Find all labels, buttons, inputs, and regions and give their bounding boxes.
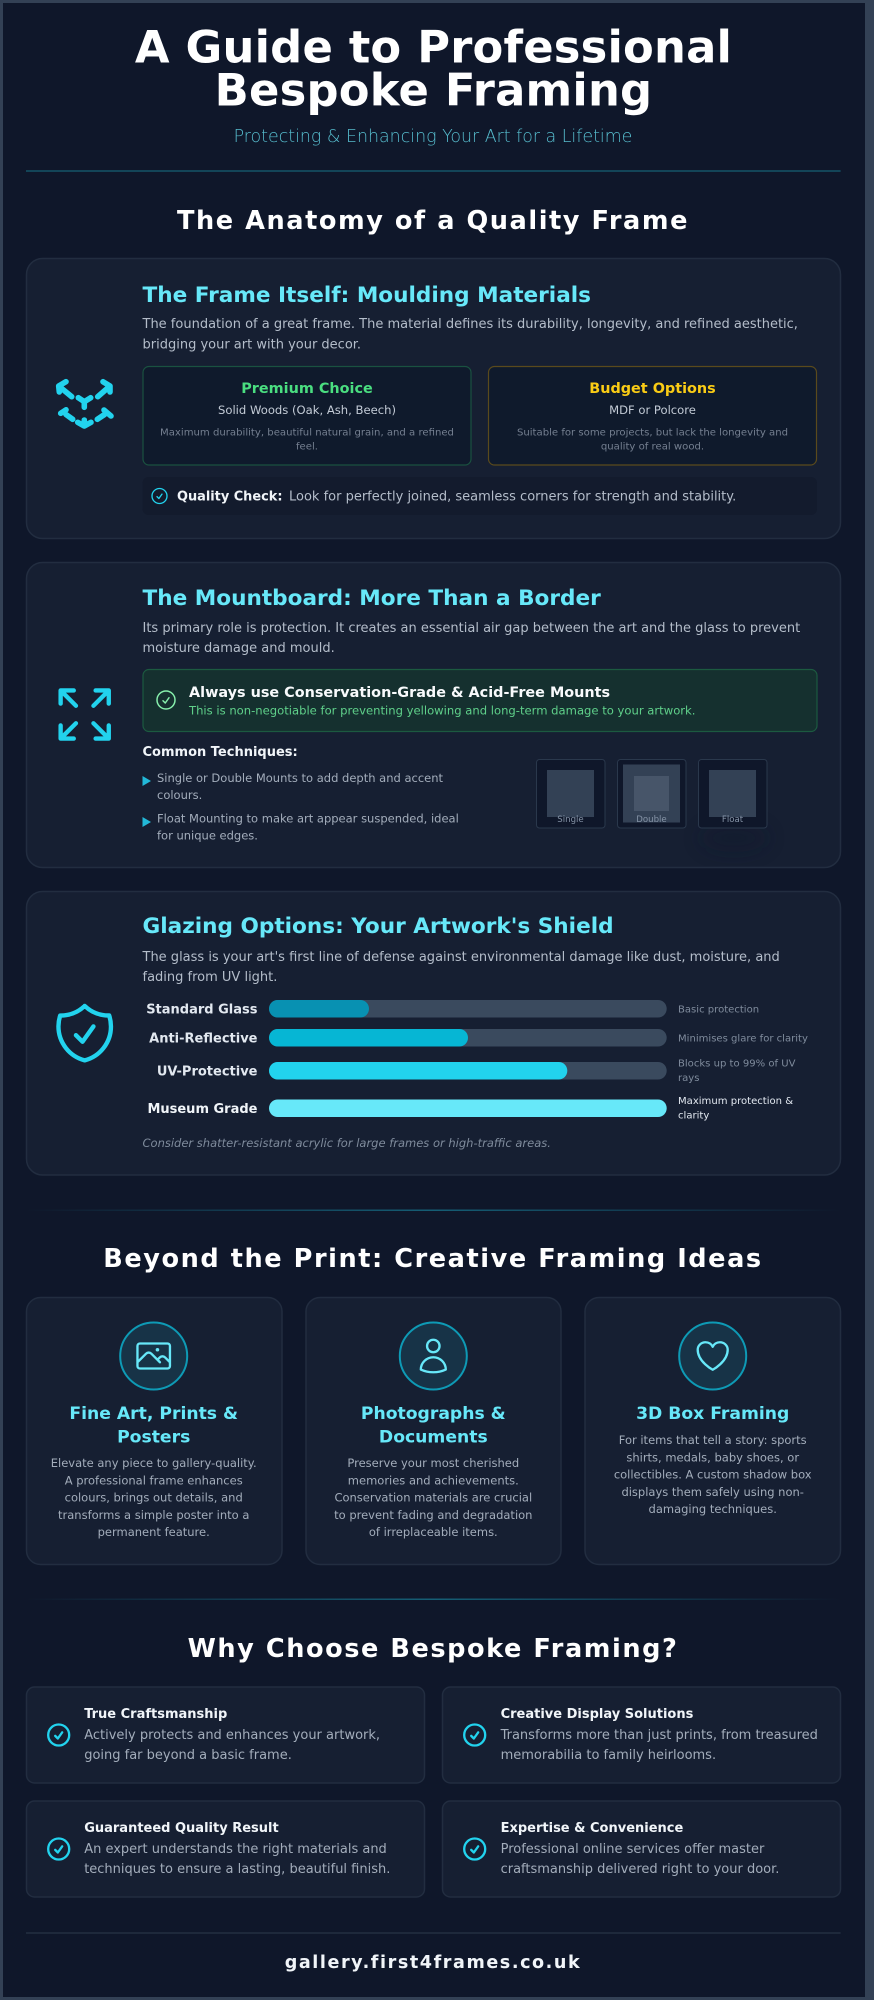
panel: display solutions: [442, 1687, 840, 1783]
heading: photographs: [361, 1404, 506, 1448]
heading: fine art: Posters: [117, 1428, 190, 1448]
heading: photographs: Photographs &: [361, 1404, 506, 1424]
heading: 3D box: 3D Box Framing: [636, 1404, 789, 1424]
list: common techniques: Single or Double Mounts to add depth and accent: [157, 771, 444, 785]
heading: glazing: Glazing Options: Your Artwork's Shield: [142, 914, 614, 939]
panel: craftsmanship: True Craftsmanship: [84, 1707, 227, 1722]
box: budget options: MDF or Polcore: [609, 403, 696, 417]
text: moulding intro: [142, 317, 798, 352]
heading: fine art: Fine Art, Prints &: [69, 1404, 238, 1424]
title: Bespoke Framing: [215, 64, 652, 116]
bar chart: glazing protection: Museum Grade: [147, 1102, 258, 1117]
panel: expertise: [442, 1801, 840, 1897]
icon: person: [400, 1322, 467, 1390]
text: 3D box: damaging techniques.: [649, 1502, 777, 1516]
list: common techniques: colours.: [157, 788, 202, 802]
list: common techniques: [142, 745, 459, 842]
text: 3D box: [614, 1433, 812, 1516]
text: glazing intro: [142, 950, 780, 985]
panel: craftsmanship: [26, 1687, 424, 1783]
text: moulding intro: The foundation of a great frame. The material defines its durability, longevity, and refined aesthetic,: [142, 317, 798, 332]
panel: quality result: An expert understands the right materials and: [84, 1842, 387, 1857]
text: fine art: A professional frame enhances: [65, 1473, 243, 1487]
panel: photographs: [306, 1298, 561, 1564]
text: fine art: Elevate any piece to gallery-quality.: [51, 1456, 257, 1470]
panel: quality result: techniques to ensure a lasting, beautiful finish.: [84, 1862, 390, 1877]
diagram: single mount: Single: [557, 815, 584, 825]
callout: quality check: [142, 477, 817, 515]
callout: quality check: Quality Check:: [177, 490, 282, 504]
text: 3D box: collectibles. A custom shadow box: [614, 1468, 812, 1482]
text: fine art: transforms a simple poster into a: [58, 1508, 249, 1522]
diagram: double mount: Double: [636, 815, 667, 825]
text: photographs: memories and achievements.: [348, 1473, 519, 1487]
box: budget options: Budget Options: [589, 381, 716, 397]
icon: arrows pointing out: [61, 690, 109, 739]
panel: expertise: Expertise & Convenience: [501, 1821, 684, 1836]
panel: glazing: [26, 892, 840, 1175]
panel: quality result: Guaranteed Quality Result: [84, 1821, 279, 1836]
text: 3D box: For items that tell a story: sports: [619, 1433, 807, 1447]
text: 3D box: displays them safely using non-: [621, 1485, 804, 1499]
text: moulding intro: bridging your art with your decor.: [142, 338, 361, 352]
diagram: float mount: Float: [722, 815, 744, 825]
text: photographs: Preserve your most cherished: [347, 1456, 519, 1470]
bar chart: glazing protection: Blocks up to 99% of UV: [678, 1058, 796, 1070]
text: photographs: [334, 1456, 532, 1539]
bar chart: glazing protection: [146, 1000, 808, 1122]
text: photographs: to prevent fading and degradation: [334, 1508, 532, 1522]
icon: cube frame: [59, 382, 111, 426]
text: photographs: of irreplaceable items.: [369, 1525, 498, 1539]
bar chart: glazing protection: Maximum protection &: [678, 1096, 793, 1107]
icon: shield check: [58, 1006, 111, 1060]
heading: fine art: [69, 1404, 238, 1448]
list: common techniques: Common Techniques:: [142, 745, 298, 760]
subtitle: Protecting & Enhancing Your Art for a Lifetime: [234, 127, 632, 147]
text: photographs: Conservation materials are crucial: [334, 1491, 532, 1505]
title: A Guide to Professional: [135, 20, 732, 74]
heading: why choose: Why Choose Bespoke Framing?: [188, 1634, 678, 1664]
text: fine art: [51, 1456, 257, 1539]
diagram: float mount: [698, 760, 768, 852]
box: premium choice: Solid Woods (Oak, Ash, Beech): [218, 403, 396, 417]
panel: craftsmanship: going far beyond a basic frame.: [84, 1748, 292, 1763]
bar chart: glazing protection: Basic protection: [678, 1004, 759, 1016]
list: common techniques: for unique edges.: [157, 828, 258, 842]
text: mountboard intro: Its primary role is protection. It creates an essential air gap between the art and the glass to prevent: [142, 621, 800, 636]
panel: expertise: Professional online services offer master: [501, 1842, 765, 1857]
box: premium choice: Premium Choice: [241, 381, 373, 397]
panel: quality result: [26, 1801, 424, 1897]
panel: craftsmanship: Actively protects and enhances your artwork,: [84, 1728, 380, 1743]
callout: quality check: Look for perfectly joined, seamless corners for strength and stability.: [289, 490, 736, 504]
bar chart: glazing protection: Minimises glare for clarity: [678, 1034, 808, 1044]
bar chart: glazing protection: clarity: [678, 1110, 709, 1122]
note: acrylic: Consider shatter-resistant acrylic for large frames or high-traffic areas.: [142, 1136, 551, 1150]
bar chart: glazing protection: rays: [678, 1073, 699, 1084]
text: fine art: colours, brings out details, and: [65, 1491, 243, 1505]
box: premium choice: feel.: [296, 442, 318, 452]
panel: expertise: craftsmanship delivered right to your door.: [501, 1862, 779, 1877]
panel: display solutions: memorabilia to family heirlooms.: [501, 1748, 716, 1763]
panel: display solutions: Transforms more than just prints, from treasured: [500, 1728, 818, 1743]
footer url: gallery.first4frames.co.uk: [285, 1953, 581, 1973]
text: mountboard intro: moisture damage and mould.: [142, 641, 335, 656]
heading: photographs: Documents: [379, 1428, 488, 1448]
panel: moulding materials: [26, 258, 840, 538]
diagram: single mount: [536, 760, 605, 828]
box: budget options: Suitable for some projects, but lack the longevity and: [517, 428, 788, 438]
text: fine art: permanent feature.: [98, 1525, 210, 1539]
box: budget options: quality of real wood.: [601, 442, 704, 452]
heading: moulding: The Frame Itself: Moulding Materials: [142, 283, 591, 308]
text: 3D box: shirts, medals, baby shoes, or: [626, 1450, 799, 1464]
panel: 3D box: [585, 1298, 840, 1564]
diagram: double mount: [618, 760, 686, 828]
text: glazing intro: fading from UV light.: [142, 970, 277, 985]
icon: picture: [120, 1322, 187, 1390]
callout: conservation grade: This is non-negotiable for preventing yellowing and long-term damage to your artwork.: [188, 704, 695, 718]
box: budget options: [488, 366, 816, 465]
text: glazing intro: The glass is your art's first line of defense against environmental damage like dust, moisture, and: [142, 950, 780, 965]
heading: mountboard: The Mountboard: More Than a Border: [142, 586, 601, 611]
bar chart: glazing protection: Standard Glass: [146, 1002, 258, 1018]
heading: creative ideas: Beyond the Print: Creative Framing Ideas: [103, 1244, 763, 1274]
panel: display solutions: Creative Display Solutions: [501, 1707, 694, 1722]
bar chart: glazing protection: Anti-Reflective: [149, 1032, 258, 1046]
list: common techniques: Float Mounting to make art appear suspended, ideal: [157, 812, 459, 826]
heading: anatomy: The Anatomy of a Quality Frame: [177, 206, 689, 236]
text: mountboard intro: [142, 621, 800, 656]
box: premium choice: [143, 366, 471, 465]
callout: conservation grade: Always use Conservation-Grade & Acid-Free Mounts: [189, 685, 610, 701]
icon: heart: [679, 1322, 746, 1390]
callout: conservation grade: [143, 670, 817, 732]
box: premium choice: Maximum durability, beautiful natural grain, and a refined: [160, 428, 454, 438]
panel: mountboard: [26, 562, 840, 868]
bar chart: glazing protection: UV-Protective: [157, 1064, 258, 1080]
title: [135, 20, 732, 116]
panel: fine art: [26, 1298, 282, 1564]
